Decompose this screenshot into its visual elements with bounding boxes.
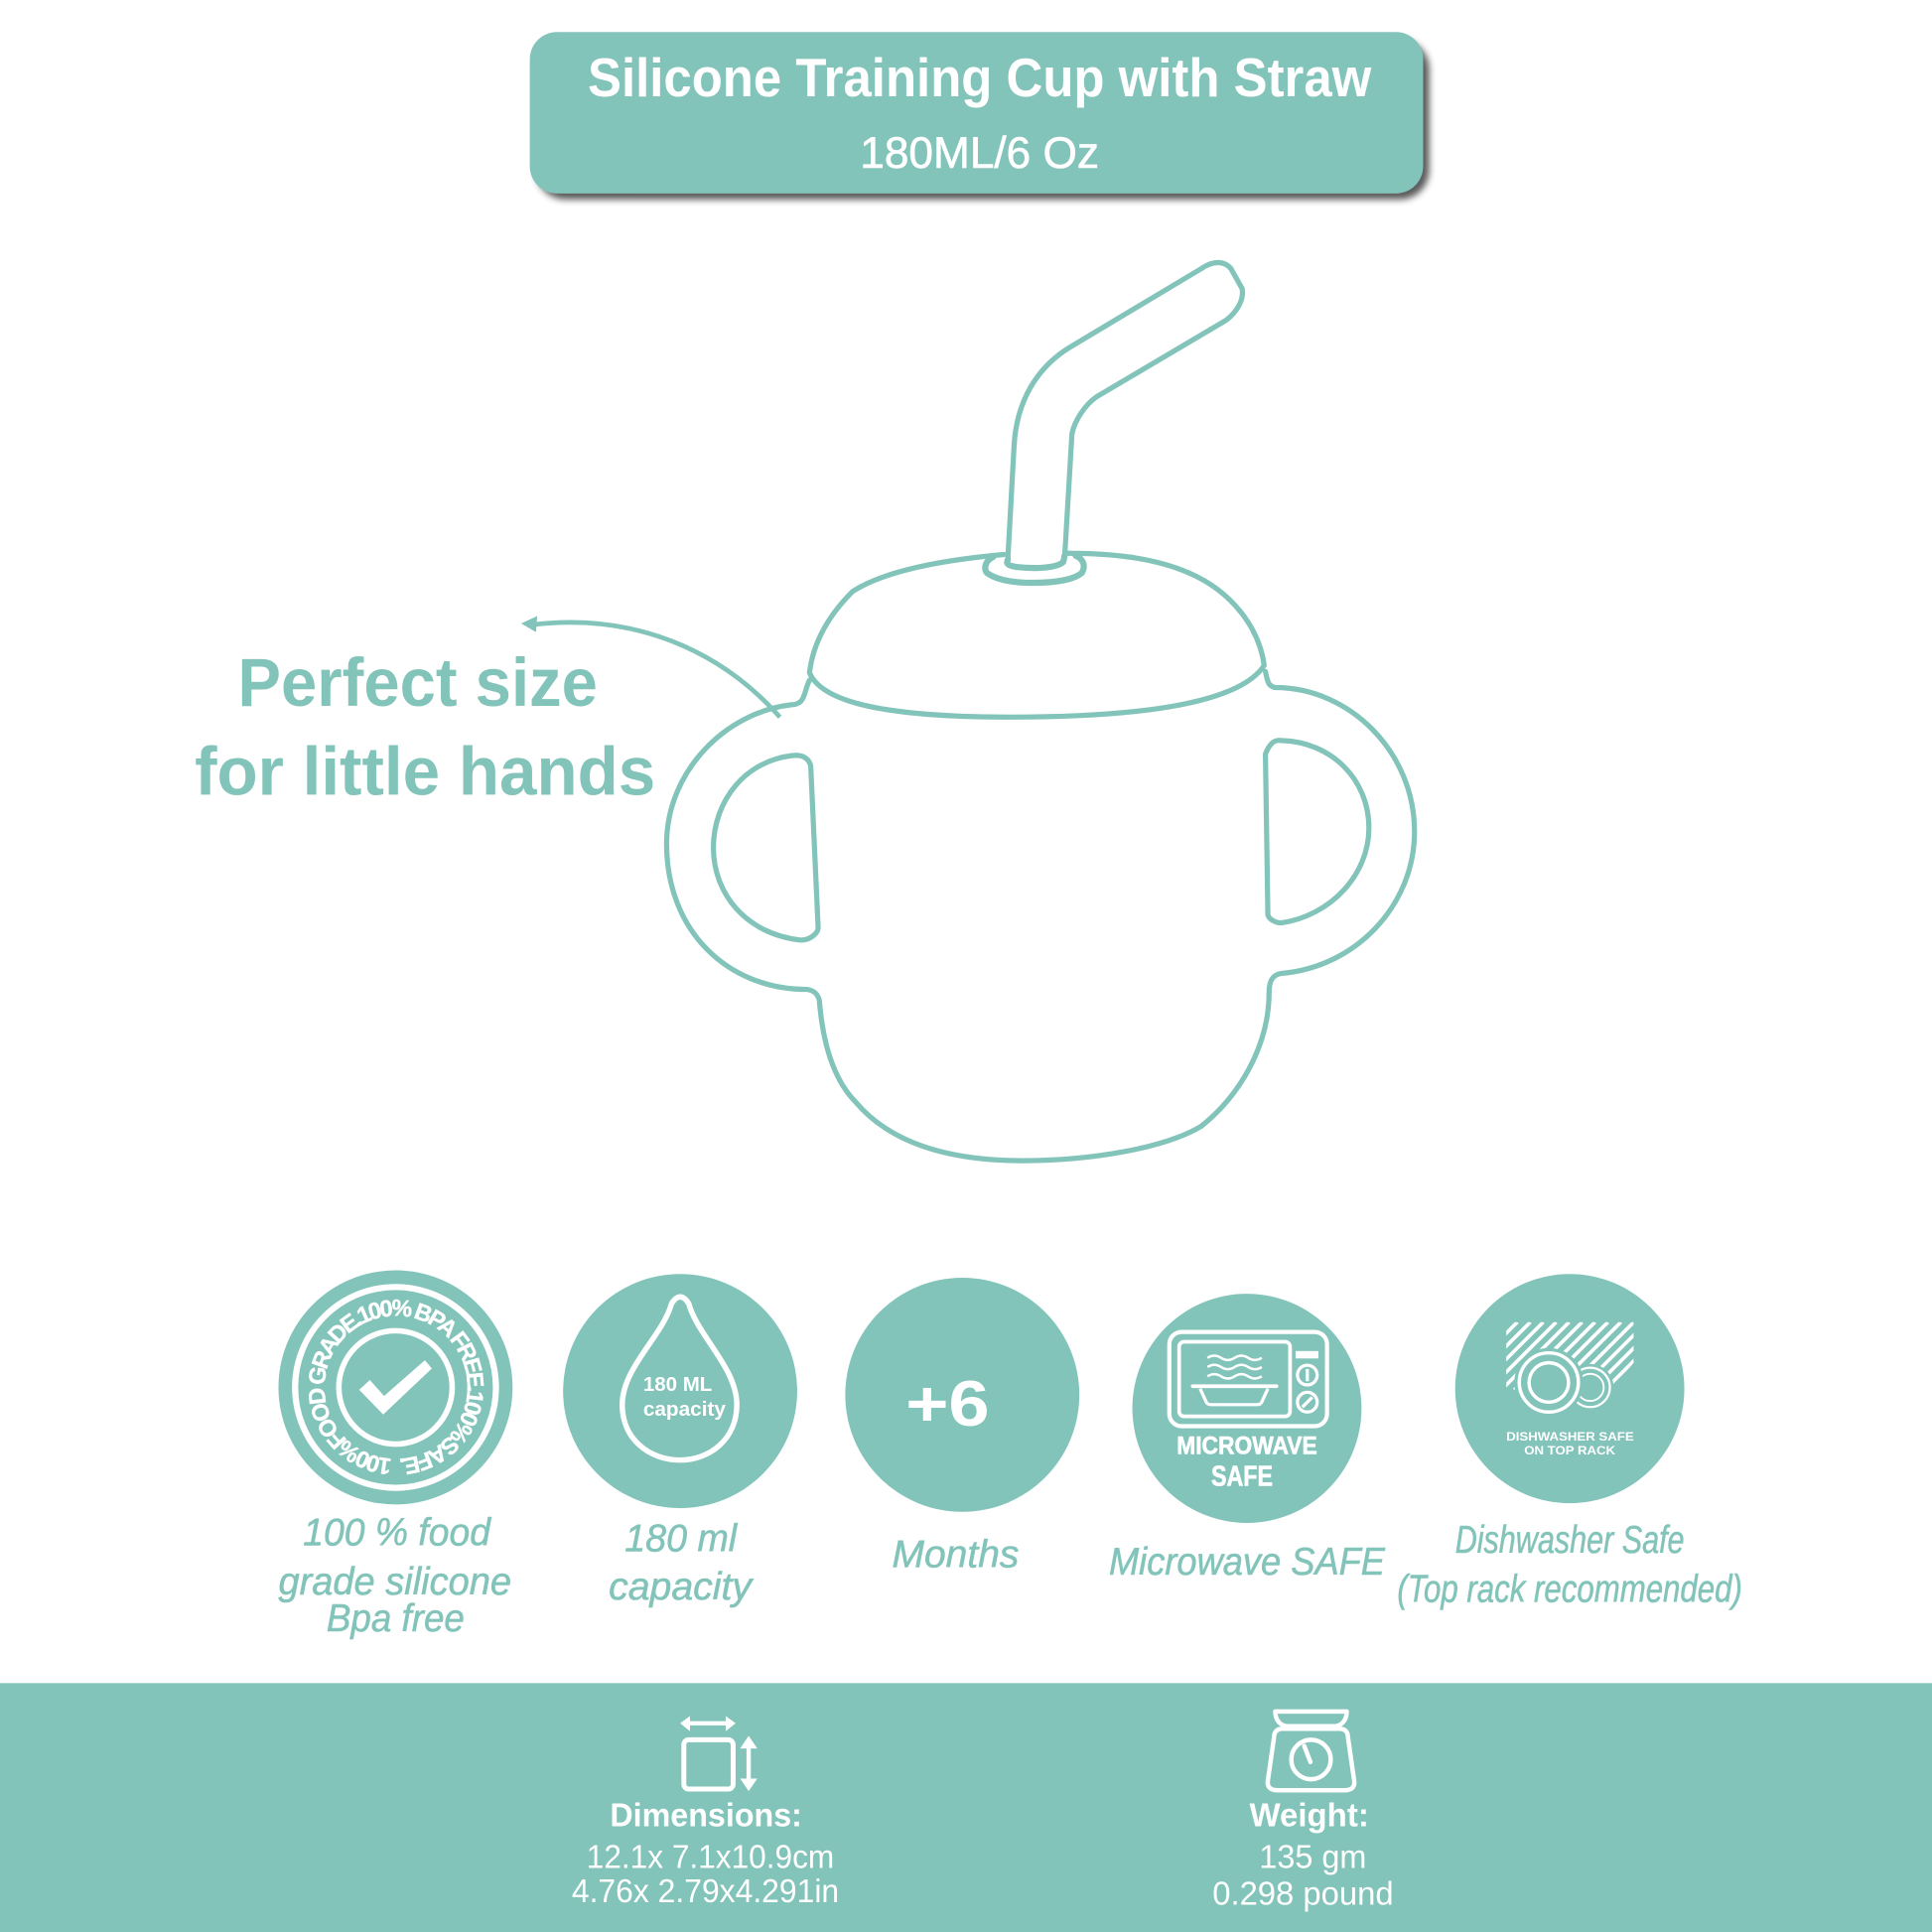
dimensions text: [572, 1797, 839, 1910]
title banner: [530, 32, 1430, 200]
label: microwave safe: Microwave SAFE: [1109, 1541, 1386, 1584]
callout text line 1: Perfect size: [238, 645, 598, 721]
icon: microwave safe: MICROWAVE: [1176, 1433, 1317, 1459]
weight text: 0.298 pound: [1212, 1876, 1394, 1913]
panel: specifications band: [0, 1683, 1932, 1932]
dimensions text: Dimensions:: [610, 1797, 802, 1834]
icon: dishwasher safe: [1437, 1274, 1686, 1503]
label: food grade: 100 % food: [303, 1511, 491, 1554]
icon: capacity drop: 180 ML: [643, 1373, 712, 1396]
callout text line 2: for little hands: [195, 734, 655, 809]
lid dome: [809, 553, 1264, 717]
left handle opening: [714, 756, 818, 940]
straw base ring: [985, 556, 1084, 583]
weight text: Weight:: [1249, 1797, 1369, 1834]
weight text: [1212, 1797, 1394, 1913]
callout arrow: [521, 617, 780, 717]
callout: perfect size: [195, 617, 780, 809]
label: dishwasher safe: [1397, 1519, 1742, 1610]
label: months: Months: [893, 1534, 1019, 1577]
label: dishwasher safe: (Top rack recommended): [1397, 1568, 1742, 1610]
icon: dishwasher safe: ON TOP RACK: [1524, 1445, 1616, 1457]
icon: age months: [845, 1278, 1079, 1512]
label: food grade: Bpa free: [327, 1597, 465, 1640]
icon: dishwasher safe: DISHWASHER SAFE: [1506, 1431, 1634, 1444]
icon: capacity drop: capacity: [643, 1398, 727, 1421]
title heading: Silicone Training Cup with Straw: [588, 48, 1372, 108]
cup line illustration: [666, 262, 1415, 1161]
label: dishwasher safe: Dishwasher Safe: [1455, 1519, 1685, 1562]
label: capacity: capacity: [609, 1566, 755, 1608]
label: food grade: [278, 1511, 511, 1640]
right handle opening: [1266, 741, 1369, 923]
title capacity subtitle: 180ML/6 Oz: [860, 129, 1099, 178]
cup body with handles: [666, 671, 1415, 1161]
icon: microwave safe: [1133, 1294, 1361, 1523]
icon: food grade badge: 100%FOOD GRADE.100% BPA FREE.100%SAFE.: [309, 1299, 484, 1475]
icon: food grade badge: [278, 1271, 512, 1505]
straw: [1008, 262, 1242, 558]
label: food grade: grade silicone: [278, 1561, 511, 1603]
weight text: 135 gm: [1259, 1839, 1366, 1875]
icon: capacity drop: [563, 1274, 797, 1508]
label: capacity: [609, 1518, 755, 1608]
dimensions text: 4.76x 2.79x4.291in: [572, 1873, 839, 1910]
label: capacity: 180 ml: [624, 1518, 739, 1561]
dimensions text: 12.1x 7.1x10.9cm: [587, 1839, 834, 1875]
icon: microwave safe: SAFE: [1211, 1461, 1273, 1493]
icon: age months: +6: [905, 1368, 990, 1440]
icon: dimensions: [680, 1716, 758, 1791]
icon: weight scale: [1268, 1712, 1354, 1790]
